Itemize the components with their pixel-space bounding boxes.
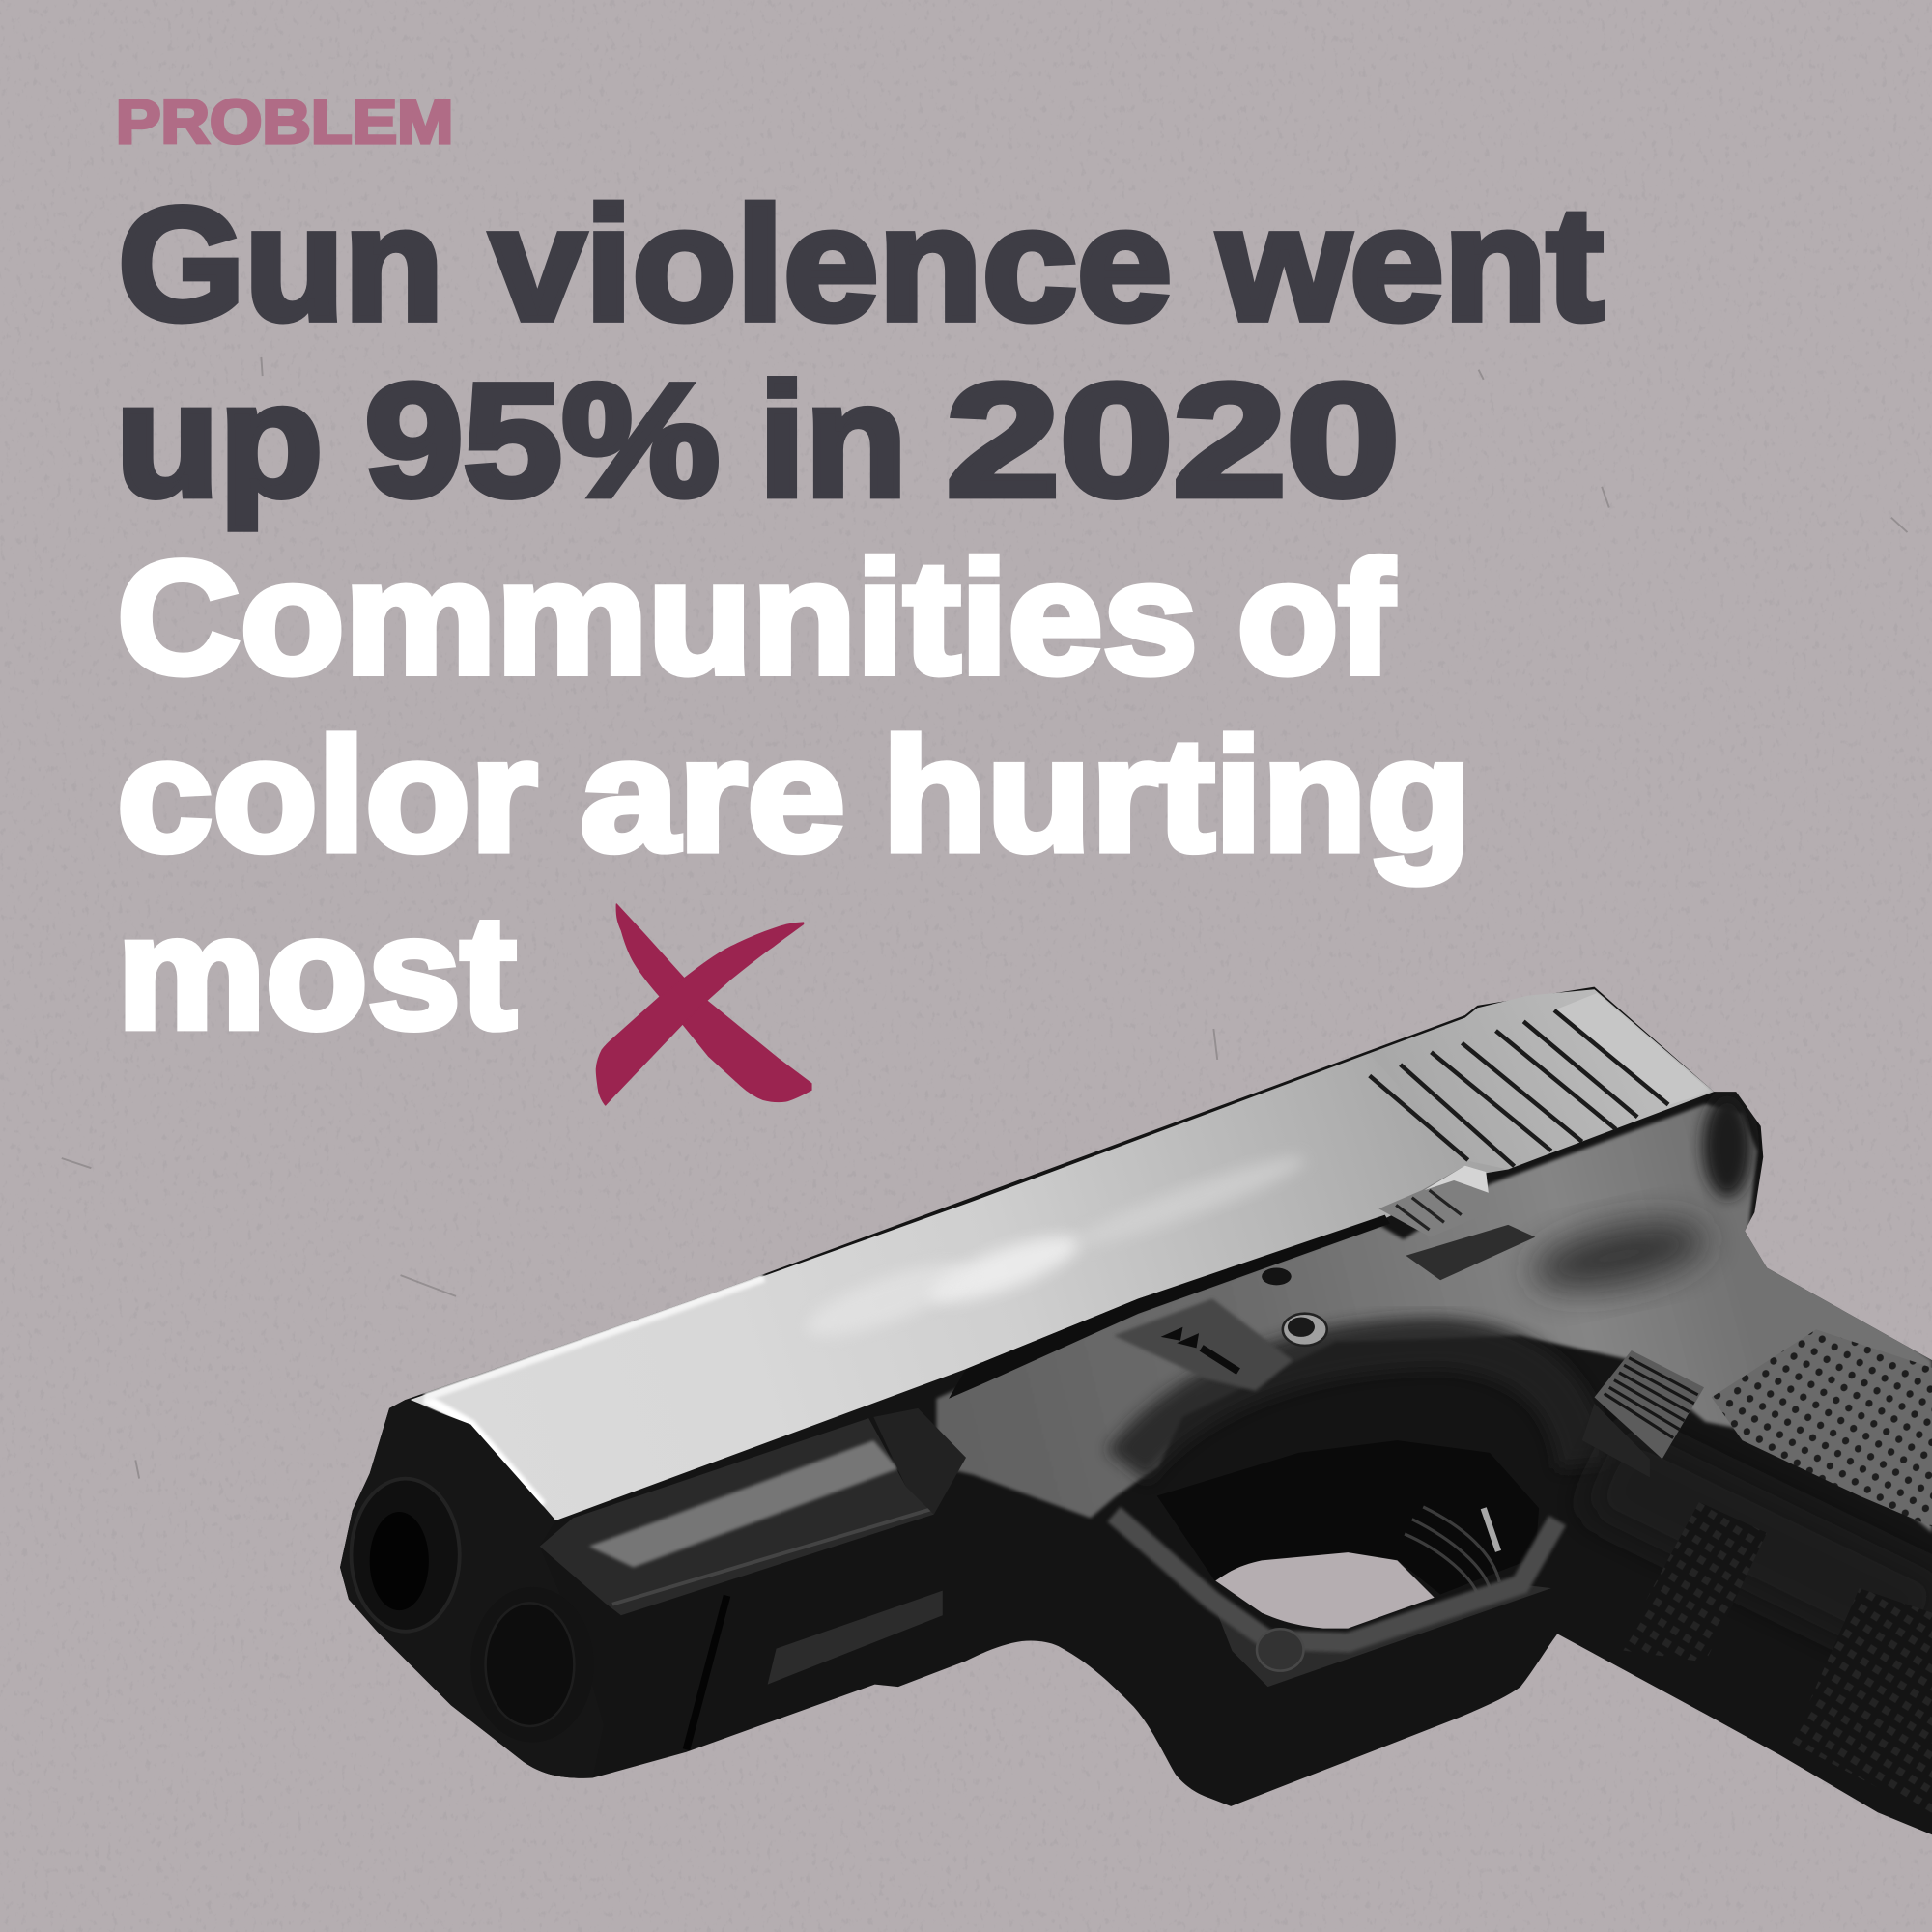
frame pin holes xyxy=(1262,1267,1327,1346)
trigger well xyxy=(1157,1440,1539,1595)
heading: gun violence statistic: 95% xyxy=(365,352,720,530)
dark slide gap xyxy=(949,1215,1390,1399)
trigger ridges xyxy=(1405,1507,1499,1597)
slide highlights xyxy=(425,1146,1310,1506)
frame groove xyxy=(686,1596,727,1749)
label: PROBLEM: PROBLEM xyxy=(116,87,453,156)
trigger guard rim xyxy=(1114,1515,1557,1642)
heading: communities of color: Communities xyxy=(117,528,1198,707)
lower grip panels xyxy=(1619,1502,1767,1662)
heading: communities of color: color xyxy=(117,706,537,885)
slide stop tab xyxy=(1378,1166,1490,1237)
recess below slide stop xyxy=(1406,1225,1535,1280)
frame body xyxy=(936,1094,1932,1627)
trigger guard underside xyxy=(1212,1584,1551,1687)
heading: communities of color: hurting xyxy=(882,706,1471,885)
takedown mark xyxy=(1161,1327,1238,1372)
image: handgun xyxy=(340,987,1932,1834)
heading: gun violence statistic: violence xyxy=(491,175,1172,354)
barrel block xyxy=(540,1418,934,1615)
heading: gun violence statistic xyxy=(116,175,1603,530)
heading: communities of color: most xyxy=(117,884,516,1063)
heading: gun violence statistic: in xyxy=(759,352,907,530)
rail notch band xyxy=(873,1408,966,1515)
heading: gun violence statistic: 2020 xyxy=(947,352,1400,530)
icon: red hand-drawn X xyxy=(596,904,811,1105)
rear serrated slide xyxy=(1369,989,1714,1169)
frame shadows xyxy=(1526,1208,1712,1303)
takedown lever recess xyxy=(1114,1298,1293,1391)
heading: gun violence statistic: up xyxy=(116,352,323,530)
trigger guard hole xyxy=(1215,1552,1435,1629)
heading: gun violence statistic: went xyxy=(1217,175,1603,354)
slide top surface xyxy=(411,1054,1508,1520)
heading: gun violence statistic: Gun xyxy=(118,175,443,354)
barrel highlight xyxy=(589,1440,898,1567)
heading: communities of color: of xyxy=(1237,528,1394,707)
front face with bores xyxy=(340,1400,604,1778)
gun silhouette xyxy=(340,987,1932,1834)
heading: communities of color: are xyxy=(581,706,845,885)
accessory slot xyxy=(768,1591,943,1685)
serrations xyxy=(1370,1010,1668,1166)
heading: communities of color xyxy=(117,528,1471,1063)
magazine release xyxy=(1582,1350,1704,1477)
grip dot texture xyxy=(1712,1329,1932,1526)
